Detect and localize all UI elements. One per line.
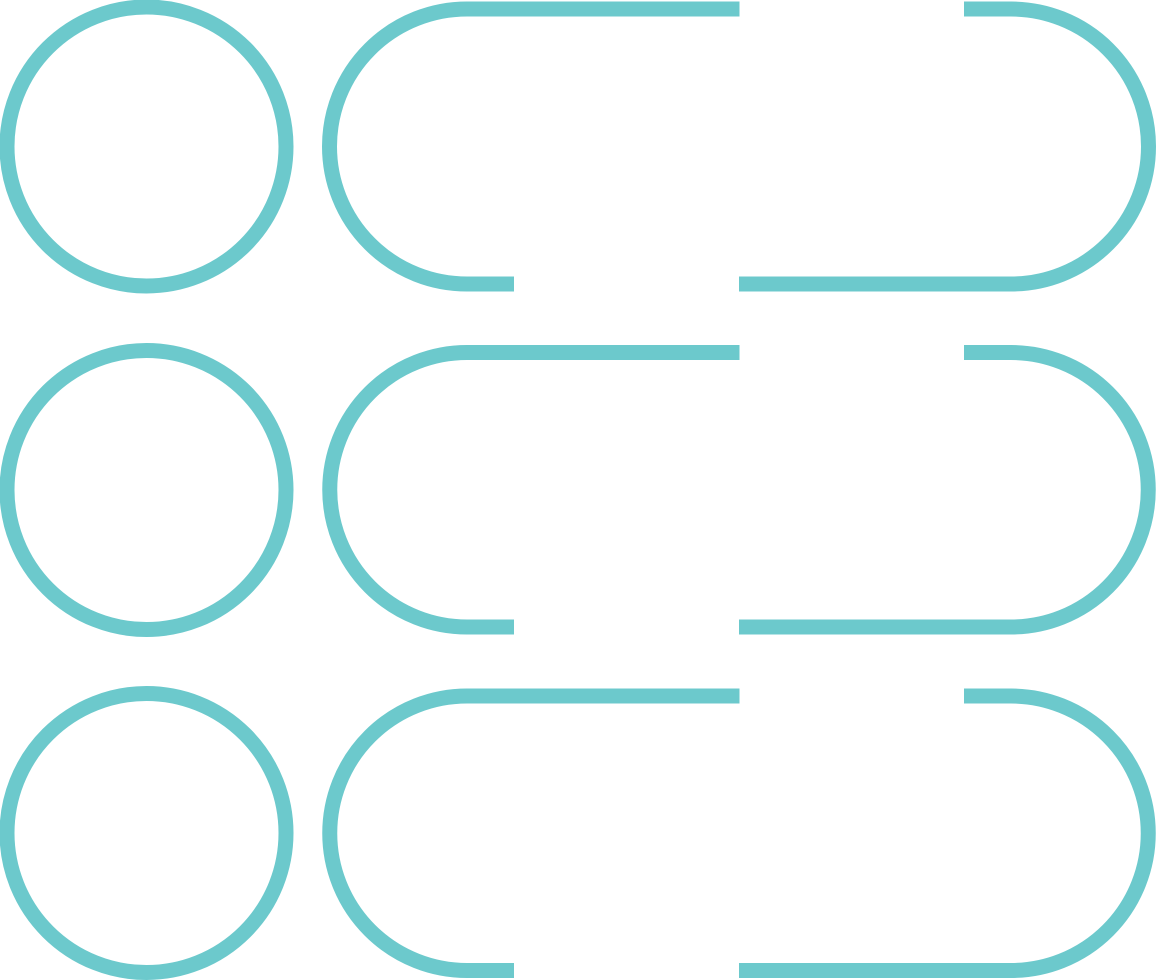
circle 3: [7, 694, 286, 972]
pill outline left 1: [330, 9, 740, 284]
pill outline right 1: [739, 9, 1149, 284]
circle 1: [7, 7, 286, 286]
pill outline left 3: [330, 696, 740, 970]
row 2: [7, 350, 1148, 630]
row 1: [7, 7, 1149, 286]
pill outline left 2: [330, 352, 740, 627]
pill outline right 2: [739, 352, 1148, 627]
circle 2: [7, 350, 286, 630]
pill outline right 3: [739, 696, 1148, 970]
row 3: [7, 694, 1148, 972]
